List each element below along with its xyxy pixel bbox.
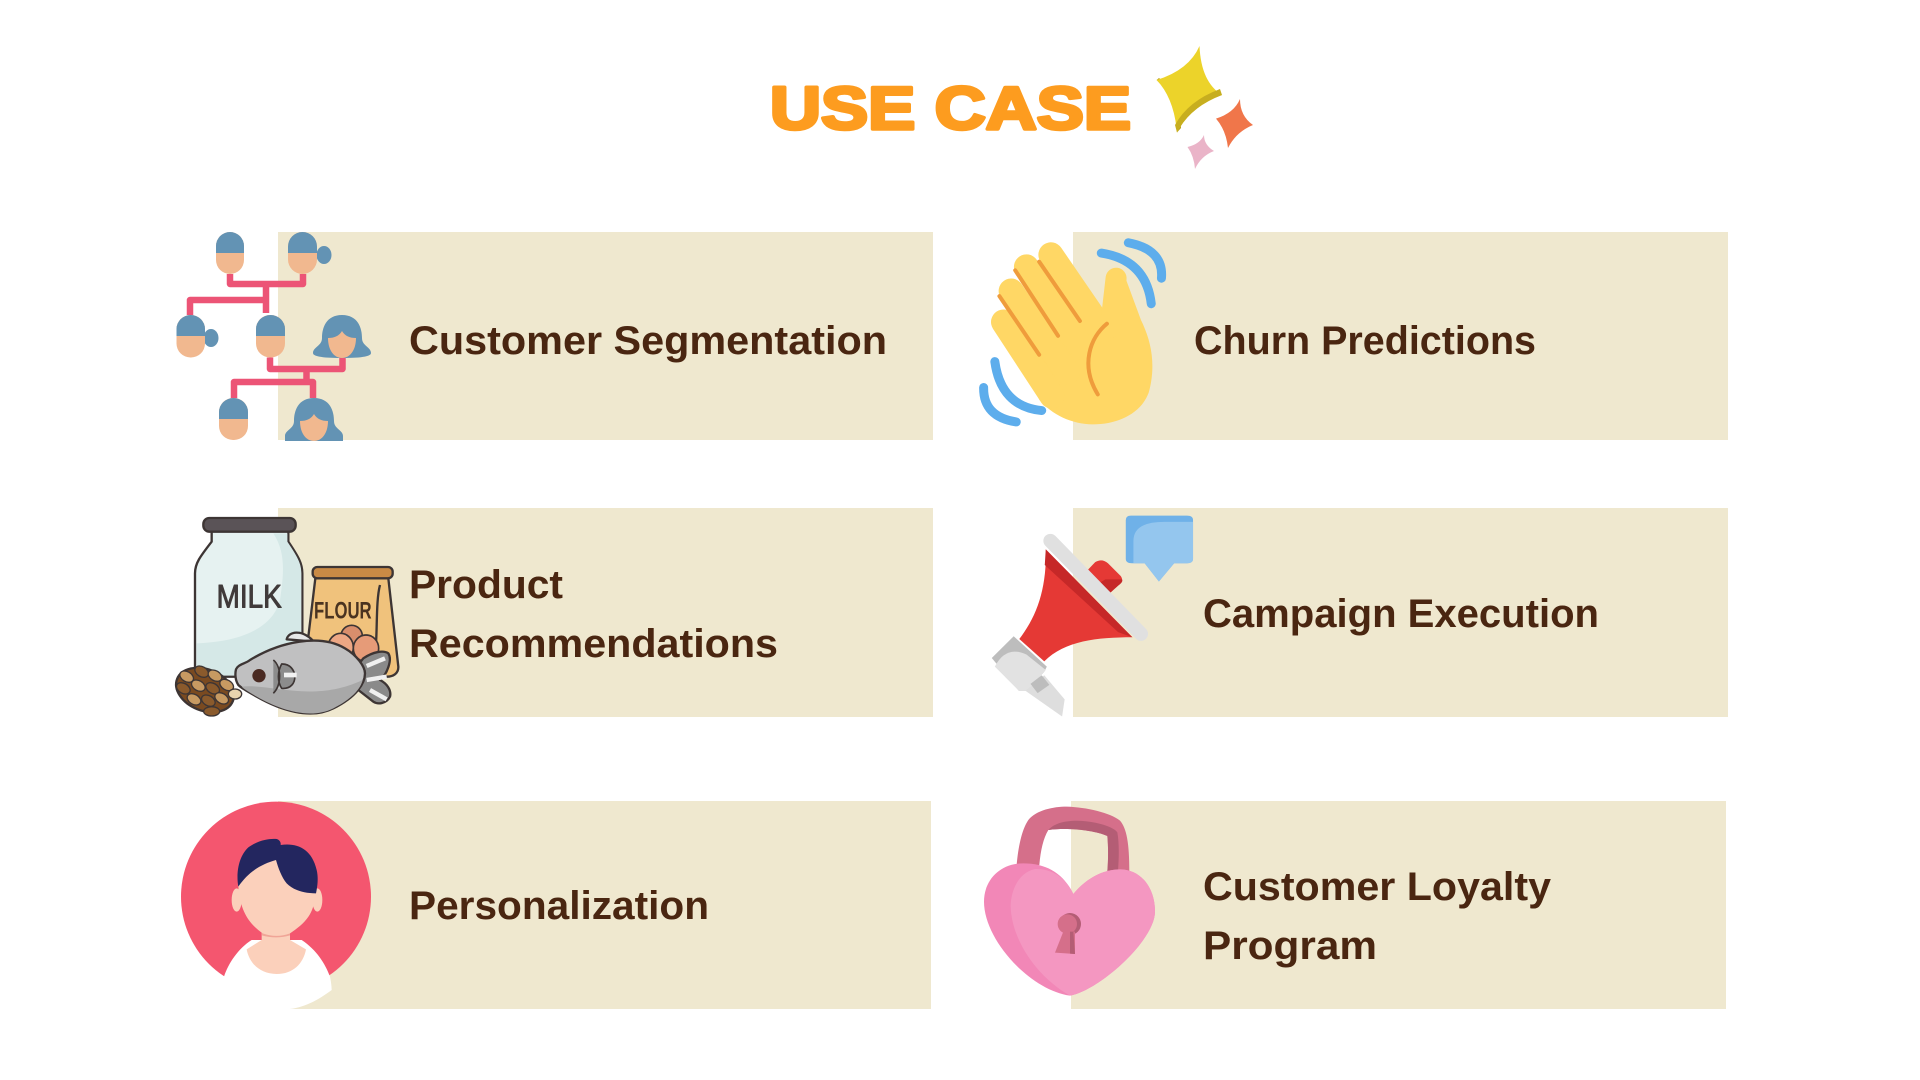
label (409, 563, 778, 666)
icon: customer hierarchy (176, 232, 371, 441)
icon: groceries (169, 518, 398, 720)
label: Customer Loyalty (1203, 865, 1552, 909)
label: Customer Segmentation (409, 319, 887, 363)
label (1203, 865, 1552, 968)
icon: heart padlock (984, 807, 1155, 996)
card: Churn Predictions (984, 232, 1728, 440)
card: Campaign Execution (992, 508, 1728, 717)
icon: sparkles (1157, 46, 1253, 169)
label: Product (409, 563, 563, 607)
label: Program (1203, 924, 1377, 968)
card: Customer Loyalty Program (984, 801, 1726, 1009)
card: Customer Segmentation (176, 232, 933, 441)
panel (278, 801, 931, 1009)
title: USE CASE (770, 75, 1131, 142)
icon: person avatar (170, 802, 371, 1009)
panel (1071, 801, 1726, 1009)
label: Churn Predictions (1194, 319, 1536, 363)
icon: megaphone and speech bubble (992, 516, 1193, 717)
panel (1073, 232, 1728, 440)
icon: groceries: FLOUR (314, 597, 372, 624)
panel (1073, 508, 1728, 717)
panel (278, 508, 933, 717)
label: Recommendations (409, 622, 778, 666)
panel (278, 232, 933, 440)
label: Personalization (409, 884, 709, 928)
label: Campaign Execution (1203, 592, 1599, 636)
icon: waving hand (984, 243, 1162, 424)
card: Product Recommendations (169, 508, 933, 720)
card: Personalization (170, 801, 931, 1009)
icon: groceries: MILK (217, 578, 282, 614)
